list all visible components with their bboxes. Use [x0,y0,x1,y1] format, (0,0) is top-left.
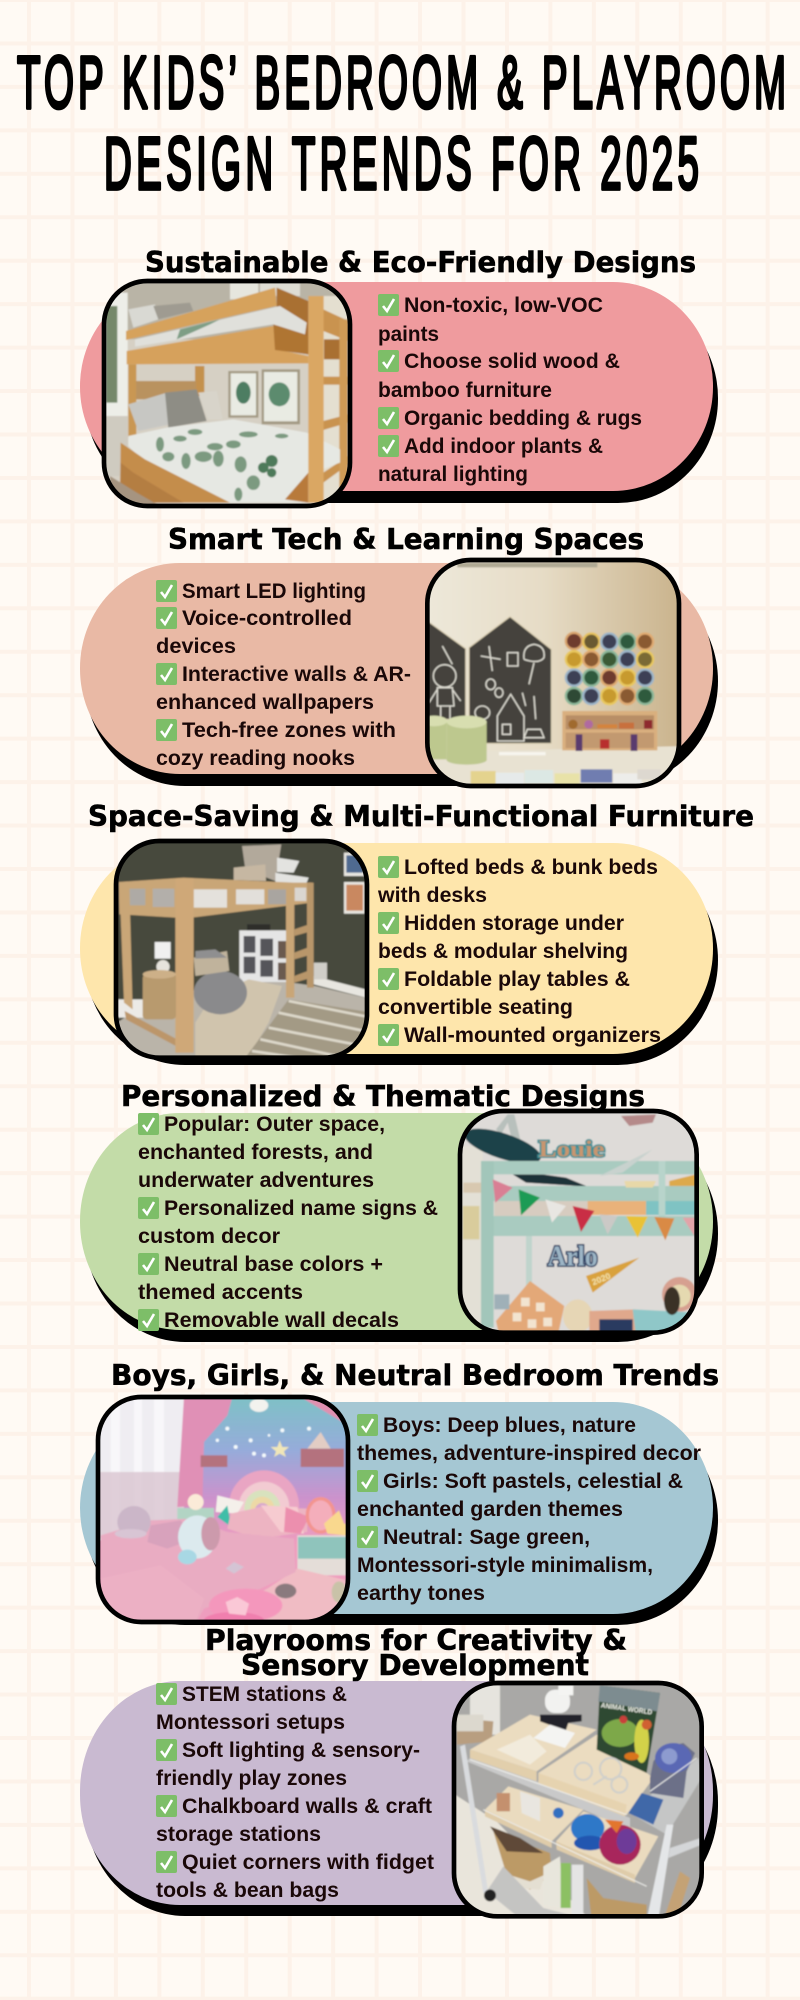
bullet list [378,293,642,486]
bullet list: STEM stations & [182,1682,347,1706]
photo: personalized bunk bed with bunting: Arlo [548,1241,598,1272]
bullet list: Soft lighting & sensory- [182,1738,420,1762]
heading: Boys, Girls, & Neutral Bedroom Trends [111,1359,719,1392]
bullet list: Interactive walls & AR- [182,662,411,686]
title: DESIGN TRENDS FOR 2025 [104,124,699,205]
bullet list: Popular: Outer space, [164,1112,385,1136]
bullet list: Montessori-style minimalism, [357,1553,653,1577]
pill background [80,563,713,774]
bullet list: bamboo furniture [378,378,552,402]
bullet list: Removable wall decals [164,1308,399,1332]
bullet list [156,579,411,770]
bullet list: enchanted forests, and [138,1140,373,1164]
bullet list: Smart LED lighting [182,579,366,603]
bullet list: Neutral: Sage green, [383,1525,590,1549]
pill background [80,1681,713,1905]
pill background [80,843,713,1054]
panel: personalized and thematic designs [80,1080,718,1342]
pill background [80,282,713,491]
bullet list: Personalized name signs & [164,1196,438,1220]
bullet list [156,1682,434,1902]
bullet list: Quiet corners with fidget [182,1850,434,1874]
pill shadow [85,1692,718,1916]
photo: wooden bunk bed with leaf bedding [100,276,355,508]
bullet list: custom decor [138,1224,281,1248]
heading: Smart Tech & Learning Spaces [168,523,644,556]
photo: personalized bunk bed with bunting: Louie [539,1137,605,1163]
bullet list: Montessori setups [156,1710,345,1734]
bullet list: enhanced wallpapers [156,690,374,714]
panel: space-saving and multi-functional furniture [80,800,754,1065]
bullet list: cozy reading nooks [156,746,355,770]
pill shadow [85,1125,718,1342]
bullet list: Tech-free zones with [182,718,396,742]
bullet list: themes, adventure-inspired decor [357,1441,702,1465]
photo: STEM activity cart: ANIMAL WORLD [600,1702,653,1717]
bullet list: themed accents [138,1280,303,1304]
bullet list: Choose solid wood & [404,349,620,373]
bullet list: friendly play zones [156,1766,347,1790]
bullet list: paints [378,322,439,346]
bullet list: beds & modular shelving [378,939,628,963]
bullet list: with desks [377,883,487,907]
photo: personalized bunk bed with bunting [456,1106,703,1336]
bullet list: Boys: Deep blues, nature [383,1413,636,1437]
bullet list: Neutral base colors + [164,1252,383,1276]
bullet list: earthy tones [357,1581,485,1605]
pill background [80,1402,713,1614]
photo: loft bed with reading nook [112,836,372,1060]
pill shadow [85,1415,718,1625]
heading: Personalized & Thematic Designs [121,1080,645,1113]
panel: playrooms for creativity and sensory development [80,1624,718,1920]
photo: personalized bunk bed with bunting: 2020 [590,1271,612,1287]
bullet list: Girls: Soft pastels, celestial & [383,1469,683,1493]
bullet list: Wall-mounted organizers [404,1023,661,1047]
title [17,43,786,205]
bullet list: Hidden storage under [404,911,625,935]
bullet list [138,1112,438,1332]
pill background [80,1113,713,1330]
heading: Sustainable & Eco-Friendly Designs [145,246,696,279]
bullet list [377,855,661,1047]
bullet list: convertible seating [378,995,573,1019]
bullet list: enchanted garden themes [357,1497,623,1521]
bullet list [357,1413,702,1605]
bullet list: Chalkboard walls & craft [182,1794,432,1818]
bullet list: devices [156,634,236,658]
bullet list: underwater adventures [138,1168,374,1192]
photo: pink rainbow unicorn bedroom [94,1392,356,1629]
panel: boys, girls and neutral bedroom trends [80,1359,719,1629]
heading: Sensory Development [241,1649,589,1682]
photo: STEM activity cart [450,1678,708,1920]
pill shadow [85,294,718,503]
bullet list: natural lighting [378,462,528,486]
pill shadow [85,576,718,786]
bullet list: Organic bedding & rugs [404,406,642,430]
pill shadow [85,855,718,1065]
bullet list: Lofted beds & bunk beds [404,855,658,879]
photo: chalkboard wall and cubby play room [421,556,684,788]
title: TOP KIDS’ BEDROOM & PLAYROOM [17,43,786,124]
bullet list: tools & bean bags [156,1878,339,1902]
bullet list: Add indoor plants & [404,434,603,458]
panel: smart tech and learning spaces [80,523,718,788]
heading [205,1624,627,1682]
bullet list: Foldable play tables & [404,967,630,991]
bullet list: Non-toxic, low-VOC [404,293,603,317]
panel: sustainable and eco-friendly designs [80,246,718,508]
bullet list: storage stations [156,1822,321,1846]
heading: Space-Saving & Multi-Functional Furniture [88,800,754,833]
bullet list: Voice-controlled [182,606,352,630]
heading: Playrooms for Creativity & [205,1624,627,1657]
